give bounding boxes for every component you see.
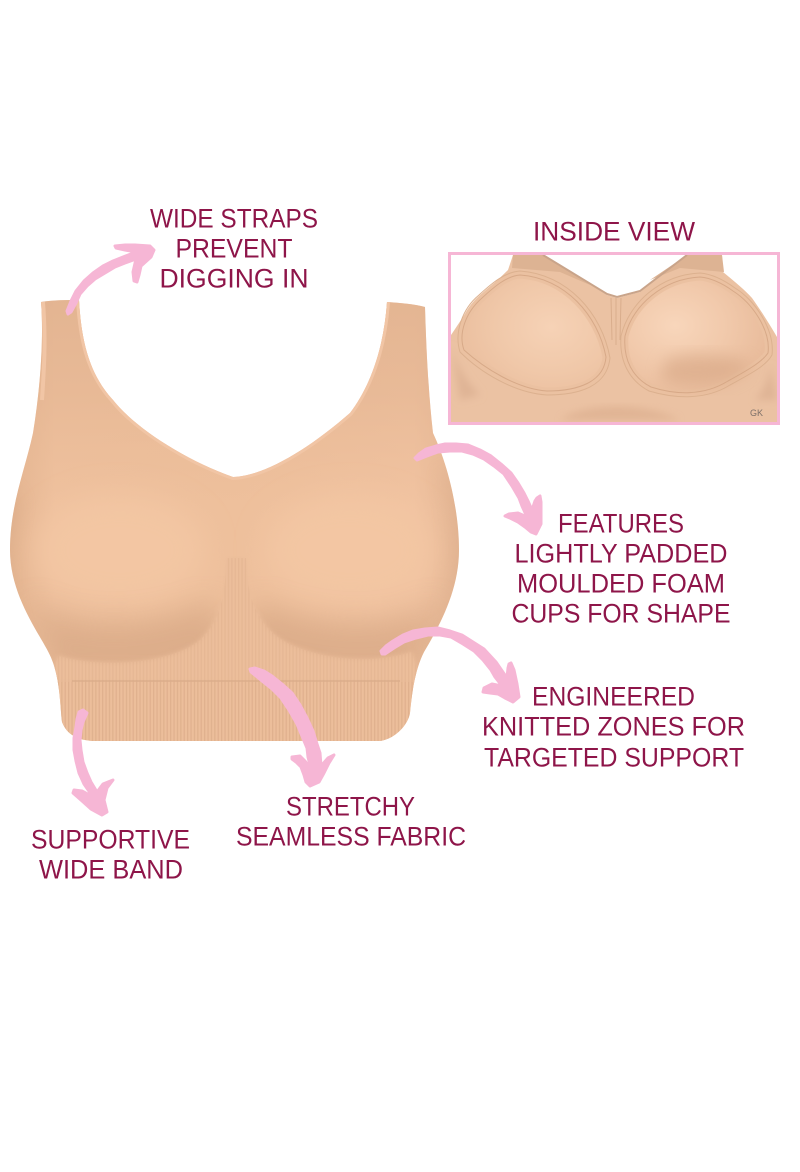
callout: supportive wide band: SUPPORTIVE [31,824,190,854]
arrow: engineered knitted zones [381,628,519,702]
callout: engineered knitted zones: TARGETED SUPPORT [484,742,744,772]
heading: inside view: INSIDE VIEW [533,216,695,246]
bra product photo [0,295,470,742]
arrow: supportive wide band [73,710,113,815]
heading: wide straps: WIDE STRAPS [150,204,318,234]
callout: engineered knitted zones [482,682,745,772]
panel: inside view photo: GK [750,408,763,418]
callout: engineered knitted zones: KNITTED ZONES FOR [482,712,745,742]
heading: wide straps: DIGGING IN [160,264,308,294]
callout: supportive wide band [31,824,190,884]
callout: engineered knitted zones: ENGINEERED [532,682,695,712]
arrow: wide straps [67,245,154,314]
heading: wide straps: PREVENT [176,234,292,264]
callout: lightly padded cups: CUPS FOR SHAPE [512,598,730,628]
callout: supportive wide band: WIDE BAND [39,854,183,884]
arrow: lightly padded cups [415,444,541,534]
callout: stretchy seamless fabric: STRETCHY [286,792,415,822]
panel: inside view photo [450,254,778,424]
callout: stretchy seamless fabric: SEAMLESS FABRIC [236,822,466,852]
heading: wide straps [150,204,318,294]
arrow: stretchy seamless fabric [250,668,334,786]
callout: lightly padded cups [512,508,730,628]
callout: stretchy seamless fabric [236,792,466,852]
callout: lightly padded cups: MOULDED FOAM [517,568,725,598]
callout: lightly padded cups: LIGHTLY PADDED [514,538,728,568]
callout: lightly padded cups: FEATURES [558,508,684,538]
